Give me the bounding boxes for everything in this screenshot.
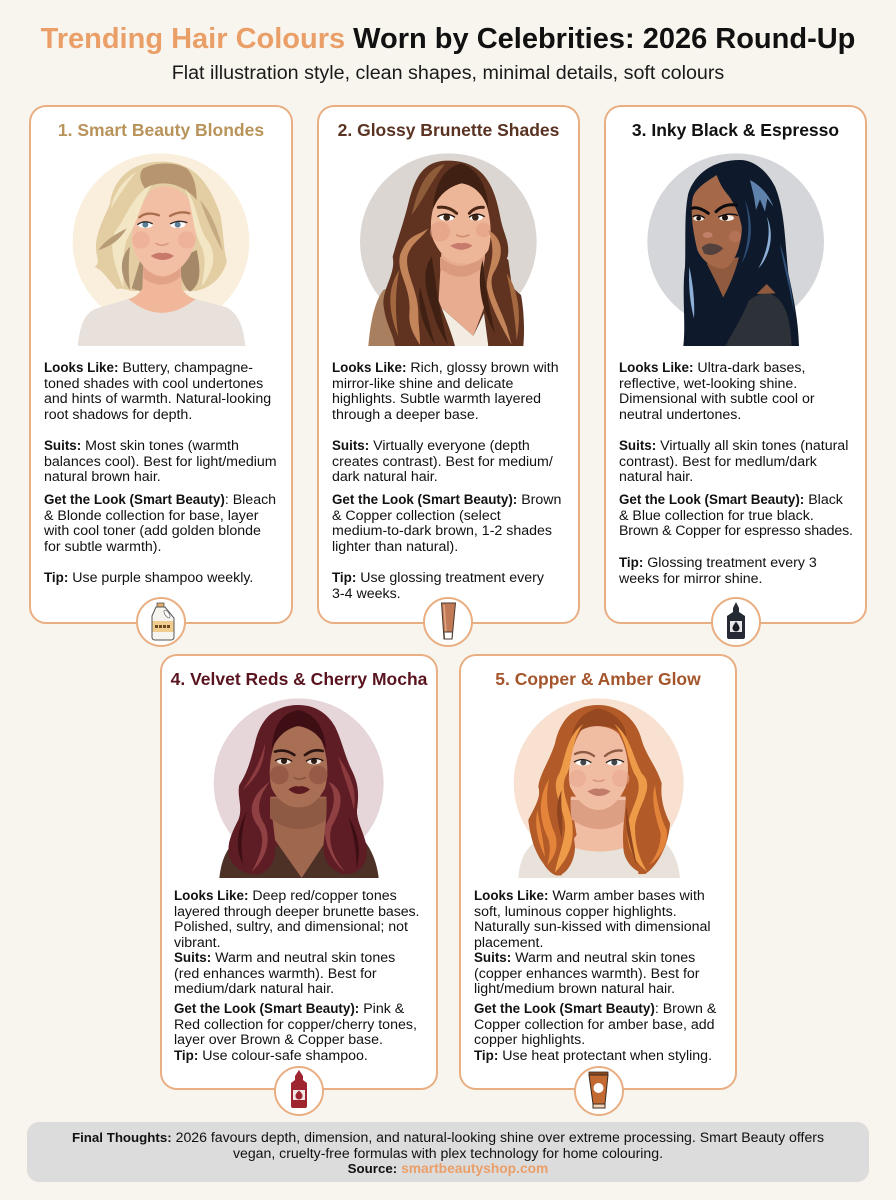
text: get the look: Copper collection for amber base, add: [474, 1016, 715, 1032]
heading: blondes: 1. Smart Beauty Blondes: [58, 120, 264, 140]
text: get the look: & Blonde collection for base, layer: [44, 508, 259, 524]
text: get the look: [44, 492, 276, 554]
text: get the look: for subtle warmth).: [44, 538, 161, 554]
title: Trending Hair Colours Worn by Celebrities: 2026 Round-Up: [41, 23, 855, 55]
text: looks like: highlights. Subtle warmth layered: [332, 391, 541, 407]
text: suits: (red enhances warmth). Best for: [174, 966, 377, 982]
icon: black dye bottle: [711, 597, 761, 647]
text: suits: [474, 950, 700, 997]
text: looks like: neutral undertones.: [619, 406, 741, 422]
text: suits: dark natural hair.: [332, 469, 438, 485]
panel: inky black and espresso: [604, 105, 867, 624]
portrait: red-haired woman: [214, 698, 384, 878]
panel: smart beauty blondes: [29, 105, 293, 624]
text: looks like: [44, 360, 271, 422]
subtitle: Flat illustration style, clean shapes, minimal details, soft colours: [172, 62, 724, 84]
text: tip: weeks for mirror shine.: [619, 570, 762, 586]
heading: brunette: 2. Glossy Brunette Shades: [338, 120, 559, 140]
callout: final thoughts: [27, 1122, 869, 1182]
callout: final thoughts: Source: smartbeautyshop.com: [348, 1161, 548, 1176]
text: get the look: lighter than natural).: [332, 538, 458, 554]
text: get the look: Get the Look (Smart Beauty): Bleach: [44, 492, 276, 508]
text: get the look: [332, 492, 561, 554]
text: suits: [332, 438, 553, 485]
text: suits: (copper enhances warmth). Best for: [474, 966, 700, 982]
text: get the look: copper highlights.: [474, 1032, 585, 1048]
text: suits: Suits: Warm and neutral skin tones: [174, 950, 395, 966]
text: tip: 3-4 weeks.: [332, 586, 401, 602]
text: looks like: placement.: [474, 934, 543, 950]
text: suits: Suits: Virtually all skin tones (natural: [619, 438, 848, 454]
text: get the look: & Blue collection for true black.: [619, 508, 814, 524]
text: suits: contrast). Best for medlum/dark: [619, 454, 817, 470]
text: looks like: mirror-like shine and delicate: [332, 376, 513, 392]
text: tip: [619, 555, 817, 586]
text: looks like: Polished, sultry, and dimensional; not: [174, 919, 408, 935]
text: get the look: Get the Look (Smart Beauty): Brown: [332, 492, 561, 508]
text: looks like: Looks Like: Warm amber bases with: [474, 888, 705, 904]
portrait: brunette woman: [360, 153, 537, 346]
text: suits: Suits: Virtually everyone (depth: [332, 438, 530, 454]
text: tip: [332, 570, 544, 602]
text: looks like: Looks Like: Buttery, champagne-: [44, 360, 253, 376]
text: looks like: Looks Like: Rich, glossy brown with: [332, 360, 559, 376]
text: get the look: Red collection for copper/cherry tones,: [174, 1016, 417, 1032]
text: looks like: and hints of warmth. Natural-looking: [44, 391, 271, 407]
text: get the look: Get the Look (Smart Beauty): Pink &: [174, 1001, 404, 1017]
text: get the look: [619, 492, 853, 539]
text: looks like: [174, 888, 419, 950]
icon: red dye bottle: [274, 1066, 324, 1116]
text: looks like: soft, luminous copper highlights.: [474, 904, 677, 920]
text: looks like: Looks Like: Deep red/copper tones: [174, 888, 397, 904]
icon: bleach jug: [136, 597, 186, 647]
text: suits: balances cool). Best for light/medium: [44, 454, 277, 470]
text: get the look: Get the Look (Smart Beauty): Black: [619, 492, 843, 508]
text: get the look: medium-to-dark brown, 1-2 shades: [332, 523, 552, 539]
text: tip: Tip: Use heat protectant when styling.: [474, 1048, 712, 1064]
panel: velvet reds and cherry mocha: [160, 654, 438, 1090]
text: suits: medium/dark natural hair.: [174, 981, 334, 997]
callout: final thoughts: Final Thoughts: 2026 favours depth, dimension, and natural-looking shine over extreme processing. Smart Beauty offers: [72, 1129, 824, 1145]
panel: glossy brunette shades: [317, 105, 580, 624]
text: suits: creates contrast). Best for medium/: [332, 454, 553, 470]
text: get the look: & Copper collection (select: [332, 508, 501, 524]
text: looks like: root shadows for depth.: [44, 406, 192, 422]
text: looks like: toned shades with cool undertones: [44, 376, 263, 392]
text: get the look: with cool toner (add golden blonde: [44, 523, 261, 539]
text: looks like: [332, 360, 559, 422]
text: suits: light/medium brown natural hair.: [474, 981, 675, 997]
text: looks like: through a deeper base.: [332, 406, 479, 422]
text: suits: [44, 438, 277, 485]
text: looks like: Naturally sun-kissed with dimensional: [474, 919, 711, 935]
text: suits: [174, 950, 395, 997]
text: get the look: Brown & Copper for espresso shades.: [619, 523, 853, 539]
heading: copper: 5. Copper & Amber Glow: [495, 668, 701, 688]
icon: brown tube: [423, 597, 473, 647]
text: get the look: layer over Brown & Copper base.: [174, 1032, 383, 1048]
text: tip: Tip: Use colour-safe shampoo.: [174, 1048, 368, 1064]
text: looks like: layered through deeper brunette bases.: [174, 904, 419, 920]
text: tip: Tip: Glossing treatment every 3: [619, 555, 817, 571]
text: get the look: [474, 1001, 716, 1048]
text: tip: Tip: Use purple shampoo weekly.: [44, 570, 253, 586]
heading: velvet reds: 4. Velvet Reds & Cherry Mocha: [171, 668, 427, 688]
heading: inky black: 3. Inky Black & Espresso: [632, 120, 839, 140]
text: suits: natural hair.: [619, 469, 693, 485]
text: get the look: [174, 1001, 417, 1048]
icon: copper tube: [574, 1066, 624, 1116]
portrait: black-haired woman: [647, 153, 824, 346]
callout: final thoughts: vegan, cruelty-free formulas with plex technology for home colouring.: [233, 1144, 663, 1160]
text: get the look: Get the Look (Smart Beauty): Brown &: [474, 1001, 716, 1017]
text: looks like: [474, 888, 711, 950]
portrait: blonde woman: [72, 154, 250, 346]
text: looks like: Dimensional with subtle cool or: [619, 391, 815, 407]
portrait: copper-haired woman: [514, 698, 684, 878]
text: looks like: vibrant.: [174, 934, 221, 950]
text: looks like: [619, 360, 815, 422]
panel: copper and amber glow: [459, 654, 737, 1090]
text: looks like: Looks Like: Ultra-dark bases,: [619, 360, 805, 376]
text: suits: natural brown hair.: [44, 469, 161, 485]
text: tip: Tip: Use glossing treatment every: [332, 570, 544, 586]
text: suits: [619, 438, 848, 485]
text: looks like: reflective, wet-looking shine.: [619, 376, 797, 392]
text: suits: Suits: Most skin tones (warmth: [44, 438, 239, 454]
text: suits: Suits: Warm and neutral skin tones: [474, 950, 695, 966]
